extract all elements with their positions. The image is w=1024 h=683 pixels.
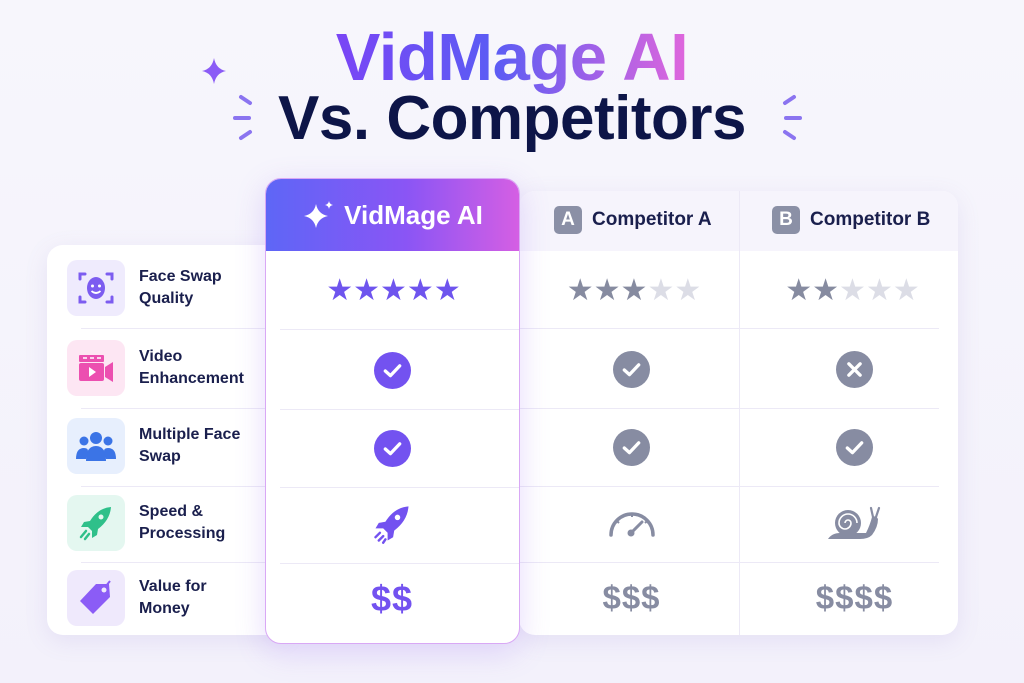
- feature: Multiple Face Swap: [67, 418, 240, 474]
- value: $$: $$: [371, 578, 413, 619]
- header: Competitor B: [772, 206, 930, 234]
- B multiple: check: [836, 429, 873, 466]
- B value: $$$$: $$$$: [816, 579, 893, 616]
- header: Competitor B: Competitor B: [810, 209, 930, 230]
- panel: feature labels: [47, 245, 287, 635]
- rating: 5 stars: ★★★★★: [326, 272, 461, 308]
- feature: Video Enhancement: [67, 340, 244, 396]
- feature: Multiple Face Swap: Swap: [139, 448, 181, 465]
- title line 1: VidMage AI: [336, 20, 688, 95]
- A speed: gauge: [609, 512, 655, 537]
- header: VidMage AI: [266, 179, 521, 251]
- feature: Value for Money: Money: [139, 600, 190, 617]
- feature: Face Swap Quality: Quality: [139, 290, 193, 307]
- A value: $$$: $$$: [602, 579, 661, 616]
- rating A: 3 stars: ★★: [647, 272, 701, 308]
- panel: VidMage AI column: [265, 178, 520, 644]
- header: Competitor B: B: [779, 209, 793, 230]
- feature: Value for Money: Value for: [139, 578, 207, 595]
- speed: rocket: [374, 506, 408, 544]
- header: VidMage AI: VidMage AI: [344, 200, 483, 230]
- feature: Multiple Face Swap: Multiple Face: [139, 426, 240, 443]
- A multiple: check: [613, 429, 650, 466]
- B speed: snail: [828, 506, 880, 539]
- feature: Video Enhancement: Enhancement: [139, 370, 244, 387]
- header: Competitor A: A: [561, 209, 575, 230]
- rating B: 2 stars: ★★: [785, 272, 839, 308]
- title line 2: Vs. Competitors: [278, 84, 746, 153]
- decorative sparkle: [202, 58, 226, 84]
- video: check: [374, 352, 411, 389]
- feature: Value for Money: [67, 570, 207, 626]
- panel: competitors: [519, 191, 958, 635]
- rating A: 3 stars: [567, 272, 701, 308]
- feature: Video Enhancement: Video: [139, 348, 182, 365]
- multiple: check: [374, 430, 411, 467]
- rating B: 2 stars: ★★★: [839, 272, 920, 308]
- rating B: 2 stars: [785, 272, 920, 308]
- header: Competitor A: Competitor A: [592, 209, 712, 230]
- decorative rays right: [782, 94, 802, 140]
- decorative rays left: [233, 94, 252, 140]
- feature: Face Swap Quality: [67, 260, 222, 316]
- feature: Face Swap Quality: Face Swap: [139, 268, 222, 285]
- feature: Speed & Processing: [67, 495, 225, 551]
- rating A: 3 stars: ★★★: [567, 272, 647, 308]
- B video: cross: [836, 351, 873, 388]
- A video: check: [613, 351, 650, 388]
- feature: Speed & Processing: Speed &: [139, 503, 203, 520]
- feature: Speed & Processing: Processing: [139, 525, 225, 542]
- header: Competitor A: [554, 206, 712, 234]
